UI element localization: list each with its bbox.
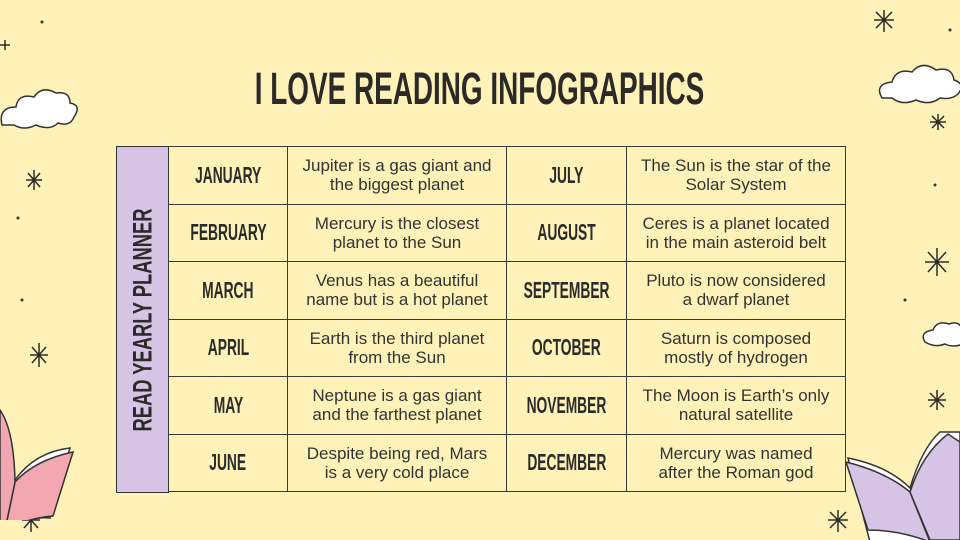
table: yearly planner: Despite being red, Mars bbox=[307, 444, 487, 463]
table: yearly planner: AUGUST bbox=[537, 219, 596, 245]
table: yearly planner: Ceres is a planet located bbox=[642, 214, 830, 233]
table: yearly planner: Earth is the third planet bbox=[310, 329, 484, 348]
table: yearly planner: in the main asteroid belt bbox=[646, 233, 826, 252]
table: yearly planner: FEBRUARY bbox=[190, 219, 266, 245]
table: yearly planner: Mercury is the closest bbox=[315, 214, 479, 233]
table: yearly planner: NOVEMBER bbox=[527, 392, 606, 418]
table: yearly planner: DECEMBER bbox=[527, 449, 606, 475]
table: yearly planner: SEPTEMBER bbox=[524, 277, 609, 303]
table: yearly planner bbox=[169, 146, 846, 492]
table: yearly planner: is a very cold place bbox=[325, 463, 469, 482]
panel: side label bbox=[116, 146, 169, 493]
table: yearly planner: The Moon is Earth’s only bbox=[643, 386, 829, 405]
table: yearly planner: OCTOBER bbox=[532, 334, 601, 360]
icon: pink book bbox=[0, 408, 74, 520]
table: yearly planner: natural satellite bbox=[679, 405, 793, 424]
table: yearly planner: and the farthest planet bbox=[312, 405, 482, 424]
panel: side label: READ YEARLY PLANNER bbox=[127, 208, 157, 431]
table: yearly planner: Solar System bbox=[685, 175, 787, 194]
table: yearly planner: The Sun is the star of the bbox=[641, 156, 831, 175]
table: yearly planner: Jupiter is a gas giant and bbox=[302, 156, 492, 175]
table: yearly planner: JUNE bbox=[210, 449, 246, 475]
table: yearly planner: after the Roman god bbox=[658, 463, 813, 482]
table: yearly planner: mostly of hydrogen bbox=[664, 348, 808, 367]
table: yearly planner: Saturn is composed bbox=[661, 329, 811, 348]
icon: purple book bbox=[844, 431, 960, 540]
table: yearly planner: a dwarf planet bbox=[683, 290, 789, 309]
table: yearly planner: Mercury was named bbox=[659, 444, 813, 463]
table: yearly planner: MARCH bbox=[202, 277, 254, 303]
table: yearly planner: the biggest planet bbox=[330, 175, 464, 194]
table: yearly planner: planet to the Sun bbox=[333, 233, 461, 252]
table: yearly planner: JULY bbox=[549, 162, 584, 188]
title: I LOVE READING INFOGRAPHICS bbox=[255, 63, 705, 114]
table: yearly planner: JANUARY bbox=[195, 162, 261, 188]
table: yearly planner: MAY bbox=[213, 392, 243, 418]
table: yearly planner: Neptune is a gas giant bbox=[312, 386, 482, 405]
table: yearly planner: APRIL bbox=[207, 334, 249, 360]
table: yearly planner: Venus has a beautiful bbox=[316, 271, 478, 290]
table: yearly planner: name but is a hot planet bbox=[306, 290, 488, 309]
table: yearly planner: Pluto is now considered bbox=[646, 271, 826, 290]
table: yearly planner: from the Sun bbox=[348, 348, 446, 367]
